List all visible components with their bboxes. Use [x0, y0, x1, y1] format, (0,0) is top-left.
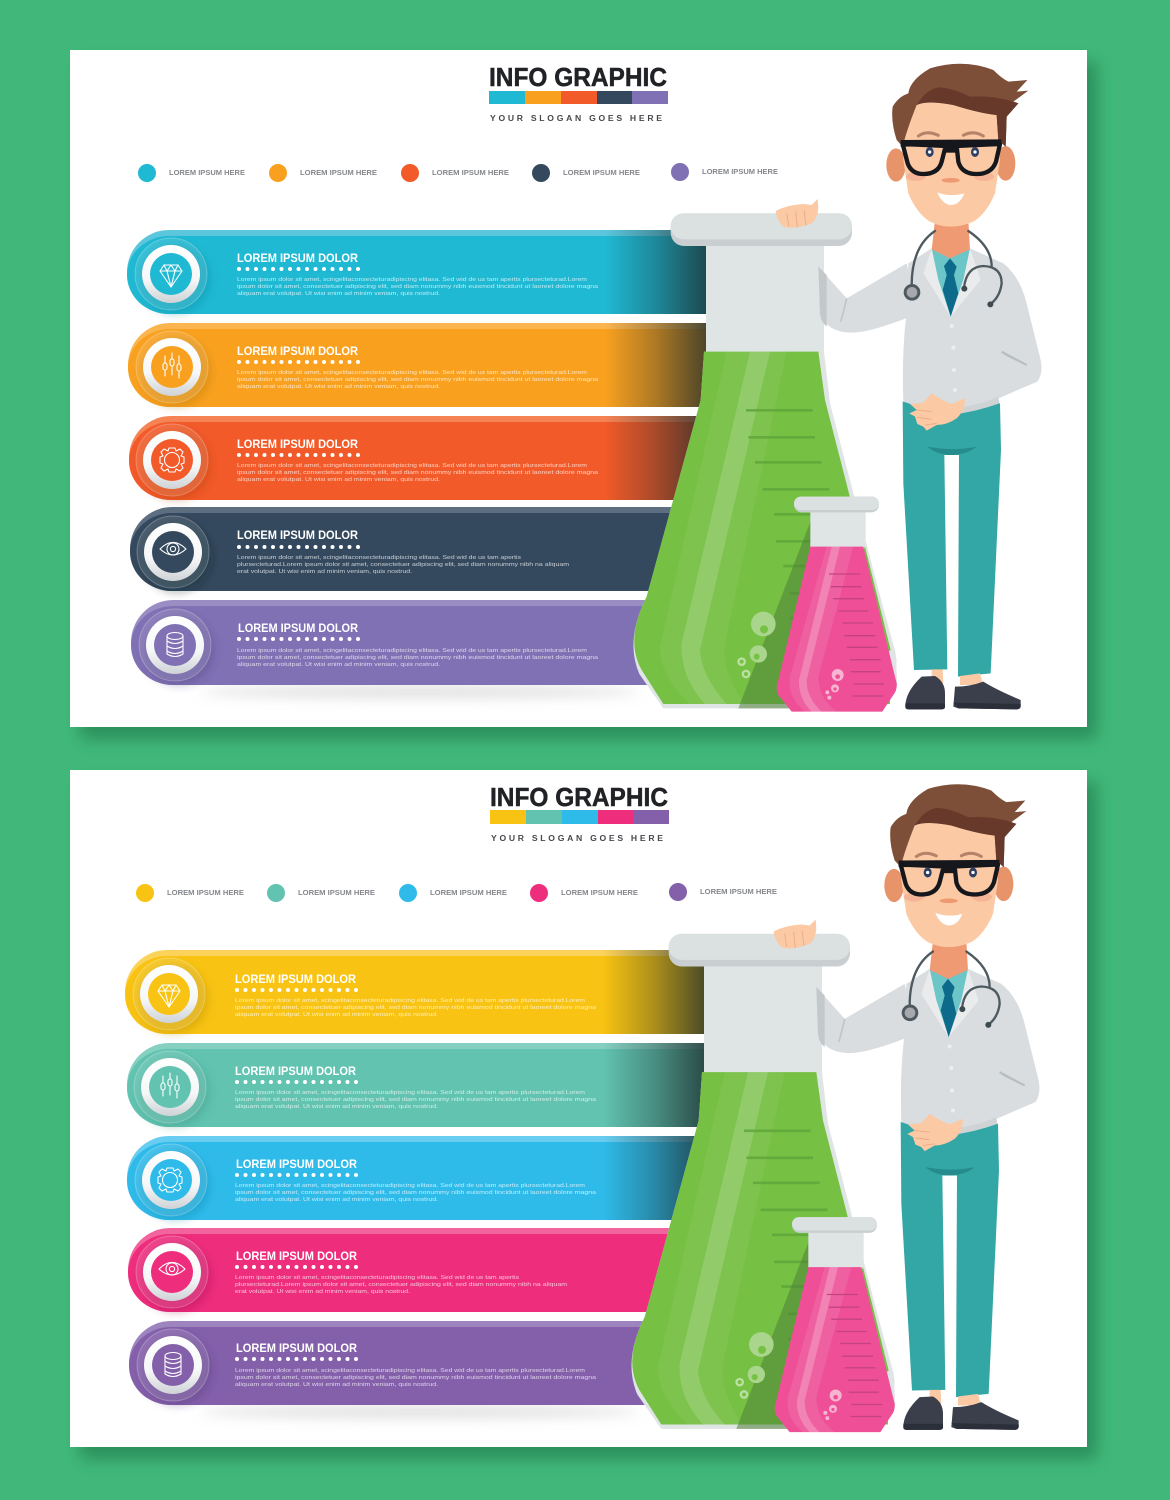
coat buttons [950, 324, 957, 392]
bar 5: aliquam erat volutpat. Ut wisi enim ad minim veniam, quis nostrud. [237, 662, 440, 668]
bar 5: ipsum dolor sit amet, consectetuer adipiscing elit, sed diam nonummy nibh euismod tincidunt ut laoreet dolore magna [237, 655, 599, 661]
bar 5 [131, 600, 670, 686]
hair [892, 64, 1028, 147]
icon: database [167, 632, 183, 656]
bar 1: aliquam erat volutpat. Ut wisi enim ad minim veniam, quis nostrud. [235, 1012, 438, 1018]
bar 2: Lorem ipsum dolor sit amet, scingelitaconsecteturadipiscing elitasa. Sed wid de us tam apertis plursecteturad.Lorem [237, 370, 587, 376]
legend: LOREM IPSUM HERE [300, 168, 377, 177]
bar 1: aliquam erat volutpat. Ut wisi enim ad minim veniam, quis nostrud. [237, 291, 440, 297]
legend: LOREM IPSUM HERE [561, 888, 638, 897]
doctor [776, 64, 1041, 709]
legend: LOREM IPSUM HERE [702, 167, 778, 176]
bar 5 [129, 1321, 670, 1406]
ground shadow [200, 686, 640, 698]
bar 3 [129, 416, 706, 501]
icon: gear [160, 448, 184, 472]
colour strip [490, 810, 669, 824]
bar 5: Lorem ipsum dolor sit amet, scingelitaconsecteturadipiscing elitasa. Sed wid de us tam apertis plursecteturad.Lorem [237, 648, 587, 654]
bar 2: ipsum dolor sit amet, consectetuer adipiscing elit, sed diam nonummy nibh euismod tincidunt ut laoreet dolore magna [235, 1097, 597, 1103]
legend: LOREM IPSUM HERE [430, 888, 507, 897]
bar 1: ipsum dolor sit amet, consectetuer adipiscing elit, sed diam nonummy nibh euismod tincidunt ut laoreet dolore magna [235, 1005, 597, 1011]
bar 3: Lorem ipsum dolor sit amet, scingelitaconsecteturadipiscing elitasa. Sed wid de us tam apertis plursecteturad.Lorem [237, 463, 587, 469]
legend: LOREM IPSUM HERE [432, 168, 509, 177]
bar 1 [127, 230, 706, 315]
panel: top infographic [70, 50, 1087, 727]
bar 3: LOREM IPSUM DOLOR [236, 1159, 358, 1171]
icon: eye [159, 1262, 185, 1275]
bar 5: LOREM IPSUM DOLOR [238, 623, 359, 635]
legend: LOREM IPSUM HERE [298, 888, 375, 897]
large flask [633, 213, 897, 708]
title: INFO GRAPHIC [489, 62, 667, 92]
slogan: YOUR SLOGAN GOES HERE [491, 833, 663, 843]
bar 3: LOREM IPSUM DOLOR [237, 439, 359, 451]
bar 4: Lorem ipsum dolor sit amet, scingelitaconsecteturadipiscing elitasa. Sed wid de us tam apertis [237, 555, 521, 561]
bar 2: aliquam erat volutpat. Ut wisi enim ad minim veniam, quis nostrud. [235, 1104, 438, 1110]
mouth [937, 192, 964, 205]
icon: database [165, 1352, 181, 1376]
face [903, 97, 1000, 227]
arm on flask [818, 263, 918, 333]
bar 3: ipsum dolor sit amet, consectetuer adipiscing elit, sed diam nonummy nibh euismod tincidunt ut laoreet dolore magna [237, 470, 599, 476]
legend: LOREM IPSUM HERE [167, 888, 244, 897]
hand on stomach [909, 393, 965, 431]
eyebrows [918, 133, 983, 136]
bar 2: LOREM IPSUM DOLOR [237, 346, 359, 358]
bar 1: ipsum dolor sit amet, consectetuer adipiscing elit, sed diam nonummy nibh euismod tincidunt ut laoreet dolore magna [237, 284, 599, 290]
bar 1 [125, 950, 704, 1035]
stethoscope [912, 231, 1002, 304]
bar 4: Lorem ipsum dolor sit amet, scingelitaconsecteturadipiscing elitasa. Sed wid de us tam apertis [235, 1275, 519, 1281]
neck [932, 220, 970, 263]
legend [136, 883, 777, 902]
glasses [901, 143, 1001, 174]
legs [903, 402, 1001, 677]
bar 2 [127, 1043, 704, 1128]
small flask [777, 497, 897, 712]
icon: eye [160, 542, 186, 555]
icon: diamond [158, 985, 180, 1007]
nose [942, 178, 960, 183]
tie [943, 258, 958, 317]
bar 2: ipsum dolor sit amet, consectetuer adipiscing elit, sed diam nonummy nibh euismod tincidunt ut laoreet dolore magna [237, 377, 599, 383]
shirt [932, 249, 970, 317]
bar 1: Lorem ipsum dolor sit amet, scingelitaconsecteturadipiscing elitasa. Sed wid de us tam apertis plursecteturad.Lorem [237, 277, 587, 283]
icon: sliders [161, 1073, 179, 1098]
bar 3: Lorem ipsum dolor sit amet, scingelitaconsecteturadipiscing elitasa. Sed wid de us tam apertis plursecteturad.Lorem [235, 1183, 585, 1189]
bar 2: LOREM IPSUM DOLOR [235, 1066, 357, 1078]
eyes [926, 147, 934, 157]
icon: diamond [160, 265, 182, 287]
lapels [923, 248, 981, 317]
bar 5: Lorem ipsum dolor sit amet, scingelitaconsecteturadipiscing elitasa. Sed wid de us tam apertis plursecteturad.Lorem [235, 1368, 585, 1374]
bar 4: LOREM IPSUM DOLOR [236, 1251, 358, 1263]
bar 3: ipsum dolor sit amet, consectetuer adipiscing elit, sed diam nonummy nibh euismod tincidunt ut laoreet dolore magna [235, 1190, 597, 1196]
bar 2: aliquam erat volutpat. Ut wisi enim ad minim veniam, quis nostrud. [237, 384, 440, 390]
bar 4 [128, 1228, 690, 1313]
slogan: YOUR SLOGAN GOES HERE [490, 113, 662, 123]
bar 1: LOREM IPSUM DOLOR [235, 974, 357, 986]
panel: bottom infographic [70, 770, 1087, 1447]
bar 2: Lorem ipsum dolor sit amet, scingelitaconsecteturadipiscing elitasa. Sed wid de us tam apertis plursecteturad.Lorem [235, 1090, 585, 1096]
bar 4 [130, 507, 690, 593]
hand on rim [776, 199, 818, 228]
bar 3 [127, 1136, 704, 1221]
bar 4: erat volutpat. Ut wisi enim ad minim veniam, quis nostrud. [235, 1289, 410, 1295]
ground shadow [200, 1406, 640, 1418]
legend: LOREM IPSUM HERE [700, 887, 777, 896]
panel shadow: bottom [80, 782, 1097, 1459]
legend: LOREM IPSUM HERE [169, 168, 245, 177]
legend: LOREM IPSUM HERE [563, 168, 640, 177]
bar 5: LOREM IPSUM DOLOR [236, 1343, 358, 1355]
illustration: flasks and doctor [633, 64, 1041, 712]
panel shadow: top [80, 62, 1097, 739]
bar 3: aliquam erat volutpat. Ut wisi enim ad minim veniam, quis nostrud. [235, 1197, 438, 1203]
icon: sliders [163, 353, 181, 378]
illustration: flasks and doctor copy [631, 784, 1039, 1432]
title: INFO GRAPHIC [490, 782, 668, 812]
bar 3: aliquam erat volutpat. Ut wisi enim ad minim veniam, quis nostrud. [237, 477, 440, 483]
bar 5: aliquam erat volutpat. Ut wisi enim ad minim veniam, quis nostrud. [235, 1382, 438, 1388]
bar 1: Lorem ipsum dolor sit amet, scingelitaconsecteturadipiscing elitasa. Sed wid de us tam apertis plursecteturad.Lorem [235, 998, 585, 1004]
coat [903, 248, 1041, 410]
legend [138, 163, 778, 182]
ears [886, 148, 906, 182]
colour strip [489, 91, 668, 104]
bar 4: plursecteturad.Lorem ipsum dolor sit amet, consectetuer adipiscing elit, sed diam nonummy nibh na aliquam [235, 1282, 567, 1288]
bar 4: plursecteturad.Lorem ipsum dolor sit amet, consectetuer adipiscing elit, sed diam nonummy nibh na aliquam [237, 562, 569, 568]
bar 5: ipsum dolor sit amet, consectetuer adipiscing elit, sed diam nonummy nibh euismod tincidunt ut laoreet dolore magna [235, 1375, 597, 1381]
shoes [905, 676, 945, 709]
bar 4: erat volutpat. Ut wisi enim ad minim veniam, quis nostrud. [237, 569, 412, 575]
icon: gear [158, 1168, 182, 1192]
bar 2 [128, 323, 706, 408]
bar 1: LOREM IPSUM DOLOR [237, 253, 359, 265]
bar 4: LOREM IPSUM DOLOR [237, 530, 359, 542]
